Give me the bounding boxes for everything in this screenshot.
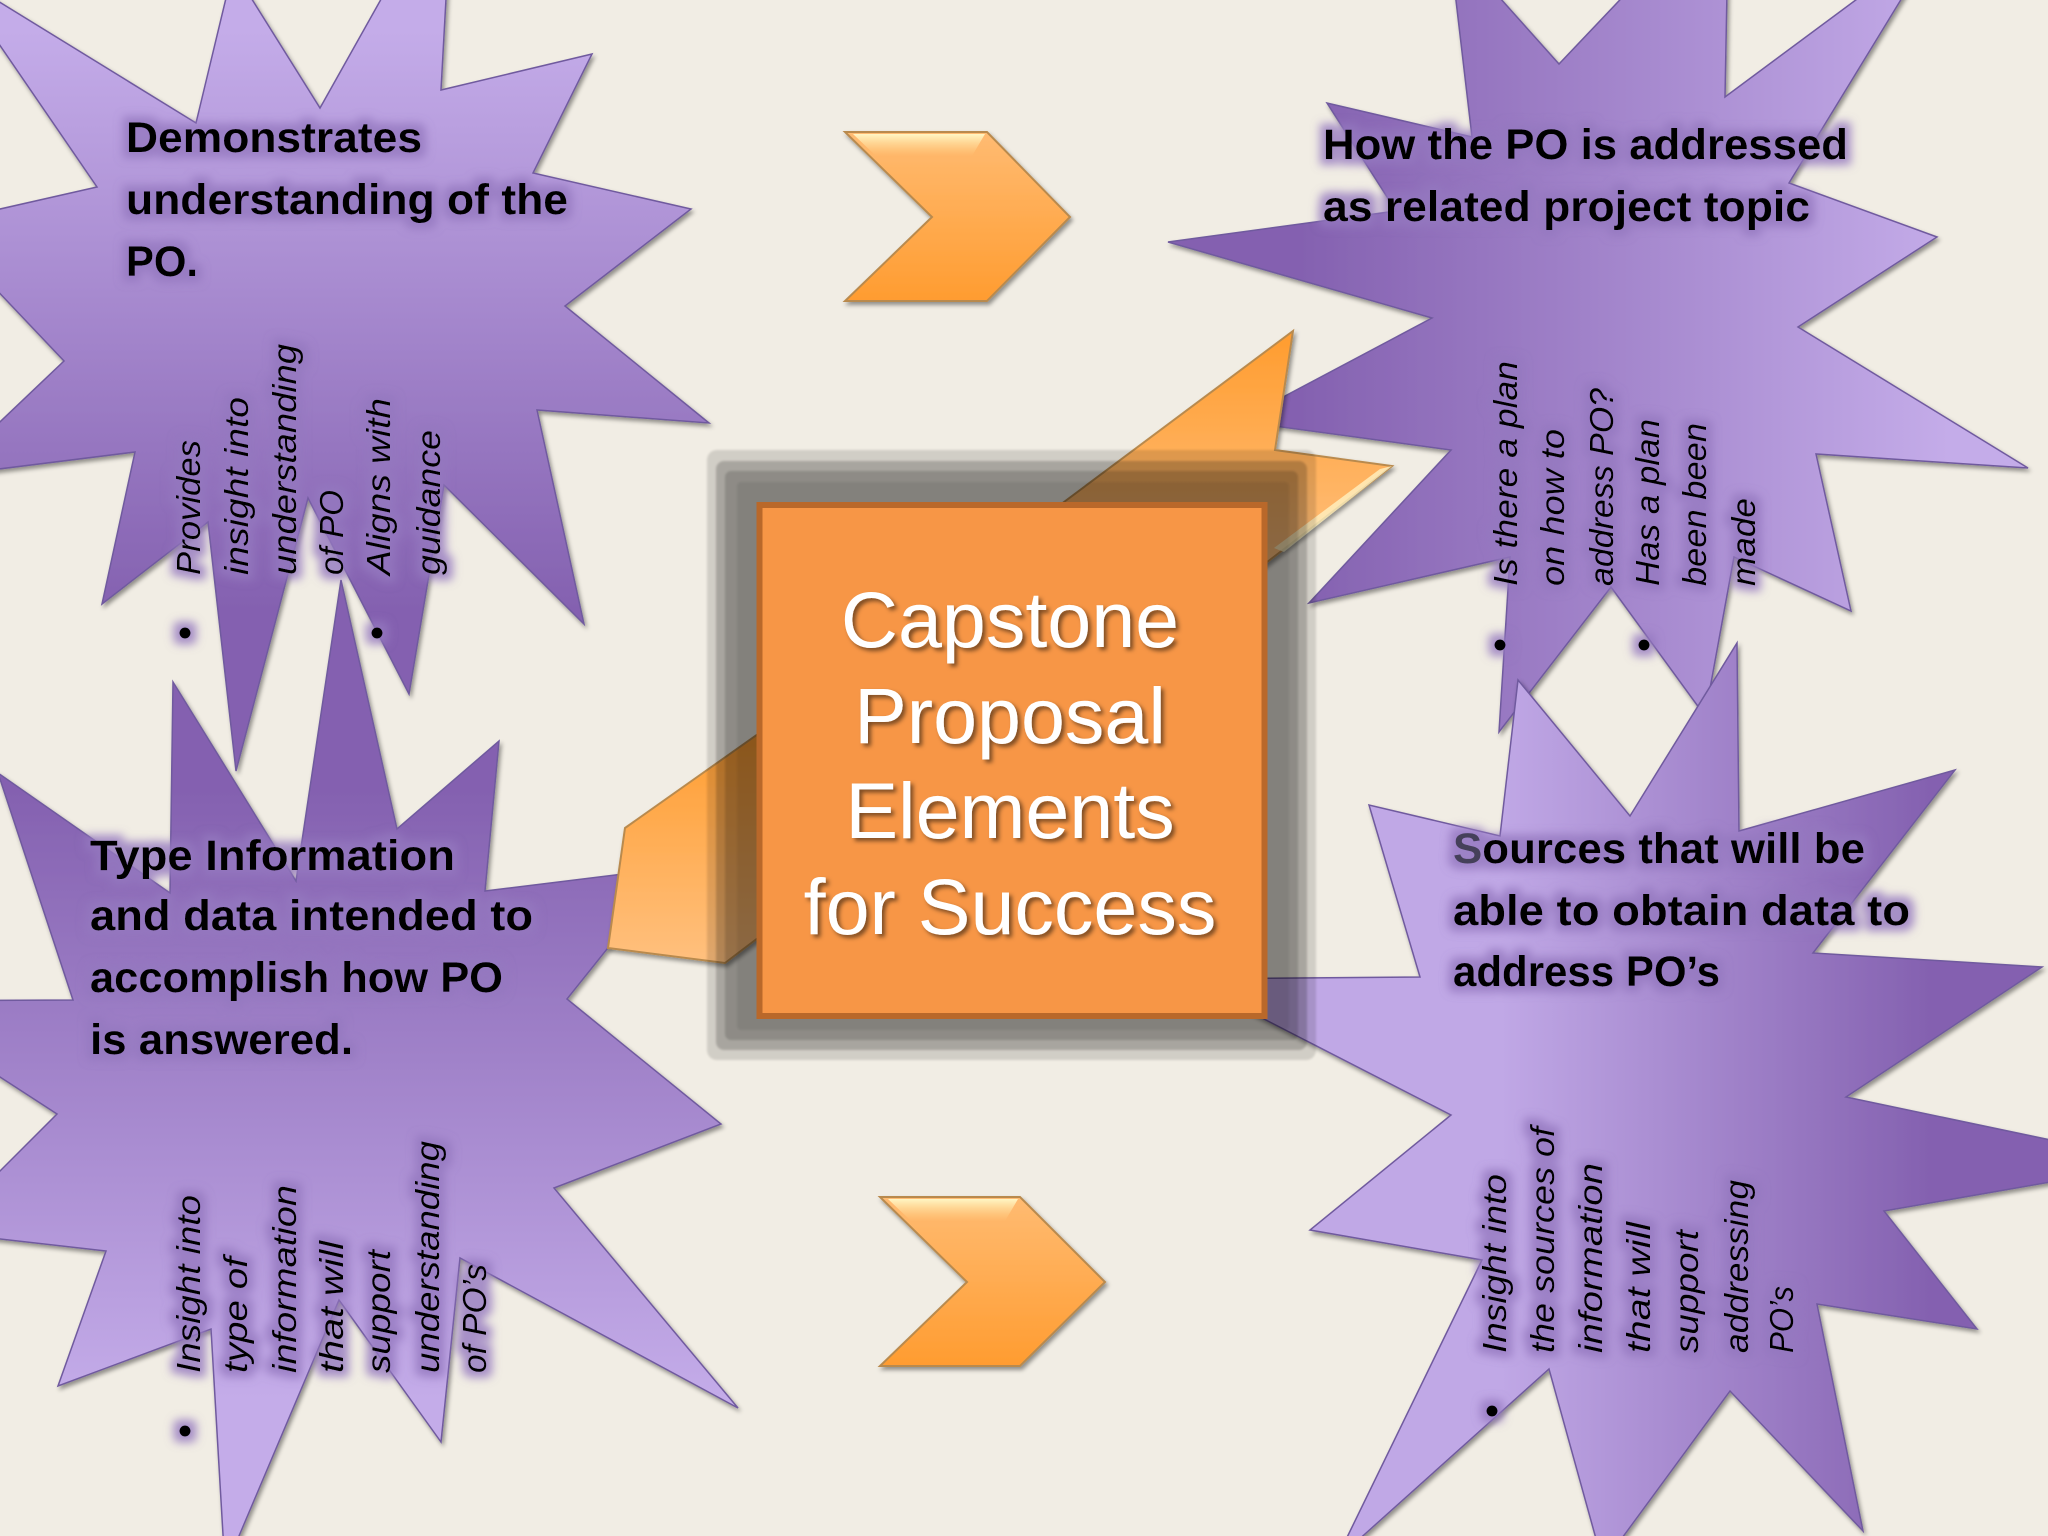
starburst shape bottom left <box>0 580 738 1536</box>
title: Capstone <box>841 575 1179 664</box>
arrow: top chevron <box>845 132 1070 301</box>
text: top left heading and bullets: Demonstrates <box>126 114 422 162</box>
text: bottom right heading and bullets: Sources that will be <box>1453 825 1865 873</box>
text: bottom left heading and bullets: understanding <box>409 1140 446 1373</box>
text: bottom left heading and bullets: information <box>266 1185 303 1373</box>
text: bottom right heading and bullets: the sources of <box>1524 1123 1561 1353</box>
text: top right heading and bullets: been been <box>1676 423 1713 586</box>
text: bottom left heading and bullets: is answered. <box>90 1016 353 1064</box>
text: bottom left heading and bullets: that will <box>313 1239 350 1373</box>
text: bottom left heading and bullets: of PO’s <box>456 1264 493 1373</box>
text: top right heading and bullets: as related project topic <box>1323 183 1810 231</box>
panel: type information and data <box>0 580 738 1536</box>
text: top right heading and bullets: address PO? <box>1583 387 1620 586</box>
title: Proposal <box>854 671 1166 760</box>
text: top right heading and bullets: on how to <box>1534 429 1571 586</box>
text: top left heading and bullets: understanding of the <box>126 176 568 224</box>
title <box>804 575 1216 951</box>
text: top left heading and bullets: of PO <box>313 490 350 575</box>
starburst shape bottom right <box>1186 643 2048 1536</box>
text: top left heading and bullets: understanding <box>266 343 303 575</box>
text: bottom right heading and bullets: PO’s <box>1763 1286 1800 1353</box>
panel: demonstrates understanding of the PO <box>0 0 709 771</box>
text: top right heading and bullets: How the PO is addressed <box>1323 121 1848 169</box>
text: bottom right heading and bullets: support <box>1668 1228 1705 1353</box>
text: bottom right heading and bullets: able to obtain data to <box>1453 887 1910 935</box>
text: bottom left heading and bullets: support <box>360 1248 397 1373</box>
text: bottom left heading and bullets: Insight into <box>170 1195 207 1373</box>
arrow: bottom chevron <box>880 1197 1105 1366</box>
text: bottom right heading and bullets: addressing <box>1718 1179 1755 1353</box>
title: Elements <box>845 766 1175 855</box>
panel: sources that will obtain data <box>1186 643 2048 1536</box>
text: bottom right heading and bullets <box>1453 825 1910 1416</box>
text: top right heading and bullets: made <box>1725 498 1762 586</box>
text: top right heading and bullets: Has a plan <box>1629 419 1666 586</box>
starburst shape top left <box>0 0 709 771</box>
central title box <box>760 505 1264 1016</box>
text: bottom right heading and bullets: that will <box>1620 1220 1657 1353</box>
text: bottom left heading and bullets <box>90 832 533 1436</box>
arrow: chevron behind box pointing upper right <box>1000 331 1392 566</box>
text: top right heading and bullets <box>1323 121 1848 650</box>
arrow: chevron behind box pointing left <box>608 722 775 963</box>
text: bottom right heading and bullets: Insight into <box>1476 1174 1513 1353</box>
text: top left heading and bullets: PO. <box>126 238 198 286</box>
text: top left heading and bullets <box>126 114 568 638</box>
starburst shape top right <box>1168 0 2028 732</box>
text: bottom right heading and bullets: information <box>1572 1163 1609 1353</box>
text: top right heading and bullets: Is there a plan <box>1487 361 1524 586</box>
title: for Success <box>804 862 1216 951</box>
text: top left heading and bullets: Provides <box>170 440 207 575</box>
text: bottom right heading and bullets: address PO’s <box>1453 948 1720 996</box>
text: bottom left heading and bullets: and data intended to <box>90 892 533 940</box>
box shadow <box>707 450 1316 1060</box>
text: top left heading and bullets: guidance <box>410 430 447 575</box>
panel: how the PO is addressed <box>1168 0 2028 732</box>
text: bottom left heading and bullets: Type Information <box>90 832 455 880</box>
text: top left heading and bullets: insight into <box>218 397 255 575</box>
text: bottom left heading and bullets: accomplish how PO <box>90 954 503 1002</box>
text: bottom left heading and bullets: type of <box>217 1253 254 1373</box>
text: top left heading and bullets: Aligns with <box>360 398 397 577</box>
